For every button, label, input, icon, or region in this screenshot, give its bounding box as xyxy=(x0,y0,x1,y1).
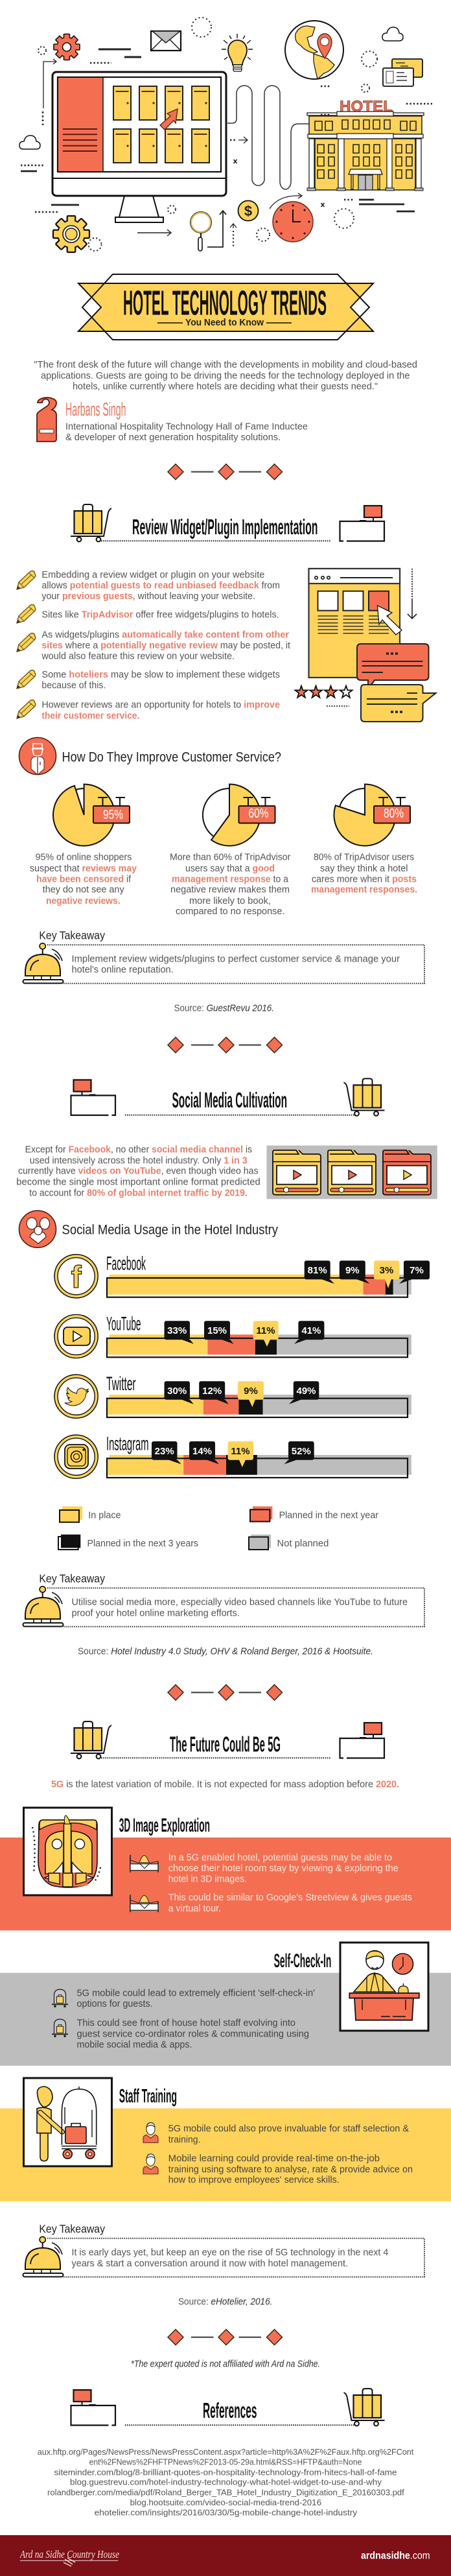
footer xyxy=(0,2535,451,2576)
callout 23% xyxy=(152,1441,181,1464)
legend: planned next 3 years xyxy=(58,1535,198,1550)
monitor with hotel room doors xyxy=(52,72,226,222)
chart row: Twitter xyxy=(54,1373,411,1418)
body text xyxy=(168,1893,412,1914)
chart row: YouTube xyxy=(54,1314,411,1358)
icon: magnifier xyxy=(191,211,211,251)
body text: 5G mobile could lead to extremely efficient 'self-check-in' xyxy=(76,1988,315,1998)
chart row: Facebook: Facebook xyxy=(106,1253,146,1274)
social media paragraph: become the single most important online format predicted xyxy=(16,1177,260,1188)
icon: bed xyxy=(130,1895,158,1912)
key takeaway 3: Key Takeaway xyxy=(39,2222,105,2235)
bullet text: sites where a potentially negative review may be posted, it xyxy=(41,641,290,651)
body text xyxy=(168,2123,409,2145)
review widget illustration xyxy=(295,569,435,722)
body text: training using software to analyse, rate & provide advice on xyxy=(168,2165,413,2175)
pie caption: 80%: cares more when it posts xyxy=(312,874,417,884)
source 2: Source: Hotel Industry 4.0 Study, OHV & Roland Berger, 2016 & Hootsuite. xyxy=(78,1647,373,1657)
icon: dollar coin: $ xyxy=(244,203,252,219)
key takeaway 3 xyxy=(23,2222,424,2277)
icon: video folder xyxy=(328,1150,376,1195)
pie caption: 60%: more likely to book, xyxy=(189,896,271,906)
expert attribution xyxy=(65,399,308,443)
callout 49% xyxy=(289,1381,319,1404)
body text: options for guests. xyxy=(76,1999,153,2009)
icon: bellhop badge xyxy=(19,738,56,775)
divider diamonds xyxy=(168,464,283,480)
hotel building xyxy=(307,98,424,191)
callout 49%: 49% xyxy=(296,1386,316,1397)
pie caption: 80% xyxy=(311,853,417,895)
icon: pencil xyxy=(17,604,36,623)
icon: light bulb xyxy=(222,34,253,71)
panel: 3D image exploration xyxy=(0,1808,451,1930)
body text: how to improve employees' service skills. xyxy=(168,2175,340,2186)
illustration frame: hotel room xyxy=(23,1808,111,1895)
legend: not planned xyxy=(249,1535,329,1550)
arrows and line accents xyxy=(21,18,432,251)
key takeaway 1: Implement review widgets/plugins to perfect customer service & manage your xyxy=(71,954,400,964)
subtitle: You Need to Know xyxy=(185,317,264,328)
bullet text: As widgets/plugins automatically take content from other xyxy=(41,630,289,640)
divider diamonds xyxy=(168,2330,283,2345)
key takeaway 3: It is early days yet, but keep an eye on the rise of 5G technology in the next 4 xyxy=(71,2247,388,2258)
reference list: siteminder.com/blog/8-brilliant-quotes-on-hospitality-technology-from-hitecs-hall-of-fame xyxy=(54,2467,397,2477)
website: ardnasidhe.com xyxy=(361,2551,430,2562)
title banner xyxy=(78,274,373,340)
illustration frame: receptionist xyxy=(340,1943,428,2031)
panel: staff training: Staff Training xyxy=(119,2086,177,2107)
pie caption: 60%: users say that a good xyxy=(185,864,275,874)
stacked bar xyxy=(107,1275,411,1297)
icon: yellow gear xyxy=(53,216,89,252)
key takeaway 2: Utilise social media more, especially video based channels like YouTube to future xyxy=(71,1597,408,1607)
bullet text: Sites like TripAdvisor offer free widgets/plugins to hotels. xyxy=(41,610,279,620)
social media paragraph: used intensively across the hotel industry. Only 1 in 3 xyxy=(30,1155,248,1166)
icon: Facebook xyxy=(54,1255,98,1298)
legend: planned next year: Planned in the next year xyxy=(279,1511,378,1521)
icon: pencil xyxy=(17,571,36,589)
5G intro: 5G is the latest variation of mobile. It is not expected for mass adoption before 2020. xyxy=(51,1780,399,1790)
callout 81% xyxy=(305,1260,334,1284)
source 3: Source: eHotelier, 2016. xyxy=(178,2297,272,2308)
icon: video folder coral xyxy=(383,1150,431,1195)
section header: review widget xyxy=(71,504,384,541)
icon: staff member xyxy=(143,2154,158,2174)
pie caption: 60%: management response to a xyxy=(172,874,289,884)
bullet text xyxy=(41,700,280,721)
social media paragraph: currently have videos on YouTube, even though video has xyxy=(18,1166,259,1177)
video folders panel xyxy=(267,1146,437,1199)
body text: In a 5G enabled hotel, potential guests may be able to xyxy=(168,1852,392,1863)
body text: training. xyxy=(168,2134,200,2145)
illustration frame: bellhop with cart xyxy=(23,2078,111,2166)
bullet text: Embedding a review widget or plugin on your website xyxy=(41,570,264,580)
body text xyxy=(168,1852,399,1885)
icon: cloud xyxy=(382,27,403,41)
callout 81%: 81% xyxy=(308,1265,327,1276)
expert attribution: Harbans Singh xyxy=(65,399,126,420)
footer logo: Ard na Sidhe Country House xyxy=(19,2548,119,2560)
panel: 3D image exploration: 3D Image Exploration xyxy=(119,1815,210,1836)
callout 7% xyxy=(399,1260,430,1284)
section header: social media xyxy=(71,1079,385,1116)
icon: cursor arrow xyxy=(377,606,402,635)
icon: YouTube xyxy=(54,1315,98,1358)
body text xyxy=(76,2018,309,2050)
arrow: down xyxy=(408,569,417,619)
bullet text: their customer service. xyxy=(41,711,139,721)
section header: 5G xyxy=(71,1721,384,1758)
callout 33%: 33% xyxy=(167,1325,187,1336)
reference list: ehotelier.com/insights/2016/03/30/5g-mobile-change-hotel-industry xyxy=(95,2507,358,2517)
callout 33% xyxy=(165,1321,194,1344)
pie chart: 95% xyxy=(53,785,130,845)
icon: Instagram xyxy=(54,1435,98,1478)
winding connector line xyxy=(227,86,310,189)
body text: Mobile learning could provide real-time on-the-job xyxy=(168,2153,380,2164)
icon: envelope xyxy=(151,31,181,51)
quote xyxy=(34,360,417,392)
bullet text: Some hoteliers may be slow to implement these widgets xyxy=(41,670,280,680)
panel: staff training xyxy=(0,2078,451,2201)
icon: pencil xyxy=(17,633,36,652)
quote: hotels, unlike currently where hotels are deciding what their guests need." xyxy=(73,382,378,392)
divider diamonds xyxy=(168,1037,283,1053)
icon: pencil xyxy=(17,700,36,718)
social media paragraph xyxy=(16,1144,260,1198)
social media paragraph: Except for Facebook, no other social media channel is xyxy=(25,1144,252,1155)
icon: people badge xyxy=(19,1211,56,1247)
icon: video folder xyxy=(273,1150,321,1195)
stacked bar xyxy=(107,1395,411,1417)
coral speech bubble xyxy=(357,644,429,689)
bullet text xyxy=(41,670,280,691)
legend: planned next 3 years: Planned in the next 3 years xyxy=(87,1539,198,1549)
key takeaway 2: Key Takeaway xyxy=(39,1572,105,1585)
review widget bullet list xyxy=(17,570,290,721)
chart row: Instagram xyxy=(54,1434,411,1478)
quote: applications. Guests are going to be driving the needs for the technology deployed in the xyxy=(41,371,410,381)
icon: ID cards xyxy=(383,59,422,86)
callout 12% xyxy=(199,1381,229,1404)
callout 3%: 3% xyxy=(380,1265,393,1276)
section header: references: References xyxy=(203,2398,257,2422)
bullet text: allows potential guests to read unbiased feedback from xyxy=(41,581,280,591)
expert attribution: International Hospitality Technology Hall of Fame Inductee xyxy=(65,422,308,432)
hotel building: HOTEL xyxy=(340,98,393,115)
callout 12%: 12% xyxy=(202,1386,222,1397)
callout 11%: 11% xyxy=(256,1325,275,1336)
callout 52%: 52% xyxy=(292,1446,311,1457)
callout 11% xyxy=(228,1441,253,1467)
callout 9%: 9% xyxy=(244,1386,258,1397)
callout 14%: 14% xyxy=(192,1446,212,1457)
divider diamonds xyxy=(168,1684,283,1700)
bullet text: your previous guests, without leaving your website. xyxy=(41,591,255,602)
body text: choose their hotel room stay by viewing & exploring the xyxy=(168,1863,399,1874)
panel: self-check-in: Self-Check-In xyxy=(274,1950,331,1972)
pie chart: 80% xyxy=(334,785,410,845)
icon: clock xyxy=(270,193,313,242)
section header: social media: Social Media Cultivation xyxy=(172,1088,287,1112)
icon: Facebook: f xyxy=(71,1260,82,1295)
icon: luggage cart xyxy=(52,1989,68,2007)
bullet text: However reviews are an opportunity for hotels to improve xyxy=(41,700,280,711)
callout 30% xyxy=(165,1381,194,1404)
pie caption: 80%: say they think a hotel xyxy=(320,864,408,874)
callout 52% xyxy=(284,1441,314,1464)
chart row: Instagram: Instagram xyxy=(106,1434,149,1455)
star rating xyxy=(295,686,353,706)
icon: door hanger xyxy=(37,397,56,442)
source 1: Source: GuestRevu 2016. xyxy=(174,1003,274,1013)
pie caption: 60%: More than 60% of TripAdvisor xyxy=(170,853,291,863)
reference list: blog.guestrevu.com/hotel-industry-technology-what-hotel-widget-to-use-and-why xyxy=(70,2477,382,2487)
callout 11% xyxy=(253,1321,279,1347)
body text xyxy=(168,2153,413,2186)
icon: Twitter xyxy=(54,1375,98,1418)
icon: pencil xyxy=(17,670,36,689)
bullet text xyxy=(41,570,280,602)
heading: customer service: How Do They Improve Customer Service? xyxy=(62,750,281,764)
section header: references xyxy=(71,2389,385,2426)
callout 15% xyxy=(204,1321,233,1344)
pie caption: 80%: 80% of TripAdvisor users xyxy=(314,853,414,863)
key takeaway 2: proof your hotel online marketing efforts. xyxy=(71,1608,240,1618)
disclaimer: *The expert quoted is not affiliated with Ard na Sidhe. xyxy=(131,2359,320,2370)
bullet text xyxy=(41,630,290,662)
pie chart: 60%: 60% xyxy=(249,807,269,821)
pie caption: 95%: suspect that reviews may xyxy=(30,864,137,874)
bullet text: because of this. xyxy=(41,681,106,691)
callout 9% xyxy=(238,1381,264,1407)
legend: planned next year xyxy=(250,1506,378,1522)
quote: "The front desk of the future will change with the developments in mobility and cloud-based xyxy=(34,360,417,370)
callout 7%: 7% xyxy=(410,1265,424,1276)
body text: This could be similar to Google's Streetview & gives guests xyxy=(168,1893,412,1903)
reference list: aux.hftp.org/Pages/NewsPress/NewsPressContent.aspx?article=http%3A%2F%2Faux.hftp.org%2FCont xyxy=(38,2447,414,2457)
body text xyxy=(76,1988,315,2009)
pie caption: 80%: management responses. xyxy=(311,885,417,895)
chart row: Facebook xyxy=(54,1253,430,1298)
reference list xyxy=(38,2447,414,2517)
callout 23%: 23% xyxy=(155,1446,174,1457)
reference list: ent%2FNews%2FHFTPNews%2F2013-05-29a.html&RSS=HFTP&auth=None xyxy=(89,2457,362,2467)
icon: luggage cart xyxy=(52,2019,68,2037)
pie caption: 95%: negative reviews. xyxy=(46,896,121,906)
callout 9% xyxy=(340,1260,369,1284)
panel: self-check-in xyxy=(0,1943,451,2066)
icon: globe with location pin xyxy=(285,21,343,79)
callout 15%: 15% xyxy=(207,1325,227,1336)
hero illustration: hotel booking technology xyxy=(19,18,432,252)
callout 11%: 11% xyxy=(231,1446,250,1457)
reference list: blog.hootsuite.com/video-social-media-trend-2016 xyxy=(130,2498,321,2507)
yellow speech bubble xyxy=(361,685,435,722)
pie chart: 80%: 80% xyxy=(384,807,404,821)
callout 41% xyxy=(294,1321,324,1344)
heading: social media usage: Social Media Usage in the Hotel Industry xyxy=(62,1222,278,1237)
pie caption: 95%: have been censored if xyxy=(36,874,132,884)
expert attribution: & developer of next generation hospitality solutions. xyxy=(65,432,281,443)
body text: 5G mobile could also prove invaluable for staff selection & xyxy=(168,2123,409,2134)
legend xyxy=(58,1506,378,1550)
icon: staff member xyxy=(143,2123,158,2143)
key takeaway 1: hotel's online reputation. xyxy=(71,965,174,975)
chart row: YouTube: YouTube xyxy=(106,1314,141,1335)
chart row: Twitter: Twitter xyxy=(106,1373,136,1395)
icon: coral gear xyxy=(54,34,80,60)
body text: a virtual tour. xyxy=(168,1904,221,1914)
stacked bar xyxy=(107,1334,411,1357)
callout 14% xyxy=(189,1441,219,1464)
body text: hotel in 3D images. xyxy=(168,1874,247,1885)
pie caption: 95%: 95% of online shoppers xyxy=(36,853,132,863)
pie caption: 60%: negative review makes them xyxy=(170,885,290,895)
pie caption: 95%: they do not see any xyxy=(43,885,124,895)
pie caption: 60%: compared to no response. xyxy=(176,906,285,917)
pie caption: 95% xyxy=(30,853,137,906)
stacked bar xyxy=(107,1455,411,1478)
social media paragraph: to account for 80% of global internet traffic by 2019. xyxy=(29,1188,248,1198)
pie chart: 60% xyxy=(203,785,275,845)
body text: This could see front of house hotel staff evolving into xyxy=(76,2018,295,2029)
pie chart: 95%: 95% xyxy=(103,808,123,822)
legend: not planned: Not planned xyxy=(277,1539,329,1549)
body text: guest service co-ordinator roles & communicating using xyxy=(76,2029,309,2040)
legend: in place: In place xyxy=(88,1511,121,1521)
bullet text: would also feature this review on your website. xyxy=(41,652,235,662)
callout 3% xyxy=(374,1260,399,1288)
icon: cloud left xyxy=(19,136,40,149)
callout 9%: 9% xyxy=(345,1265,360,1276)
icon: dollar coin xyxy=(238,201,258,220)
callout 30%: 30% xyxy=(167,1386,187,1397)
legend: in place xyxy=(60,1506,121,1522)
reference list: rolandberger.com/media/pdf/Roland_Berger_TAB_Hotel_Industry_Digitization_E_20160303.pdf xyxy=(47,2487,404,2497)
section header: 5G: The Future Could Be 5G xyxy=(170,1732,281,1756)
icon: bed xyxy=(130,1855,158,1873)
callout 41%: 41% xyxy=(301,1325,321,1336)
body text: mobile social media & apps. xyxy=(76,2040,192,2050)
key takeaway 1 xyxy=(23,928,424,984)
key takeaway 2 xyxy=(23,1572,424,1627)
pie caption: 60% xyxy=(170,853,291,917)
key takeaway 1: Key Takeaway xyxy=(39,928,105,941)
footer logo xyxy=(19,2548,119,2566)
key takeaway 3: years & start a conversation around it now with hotel management. xyxy=(71,2258,348,2269)
